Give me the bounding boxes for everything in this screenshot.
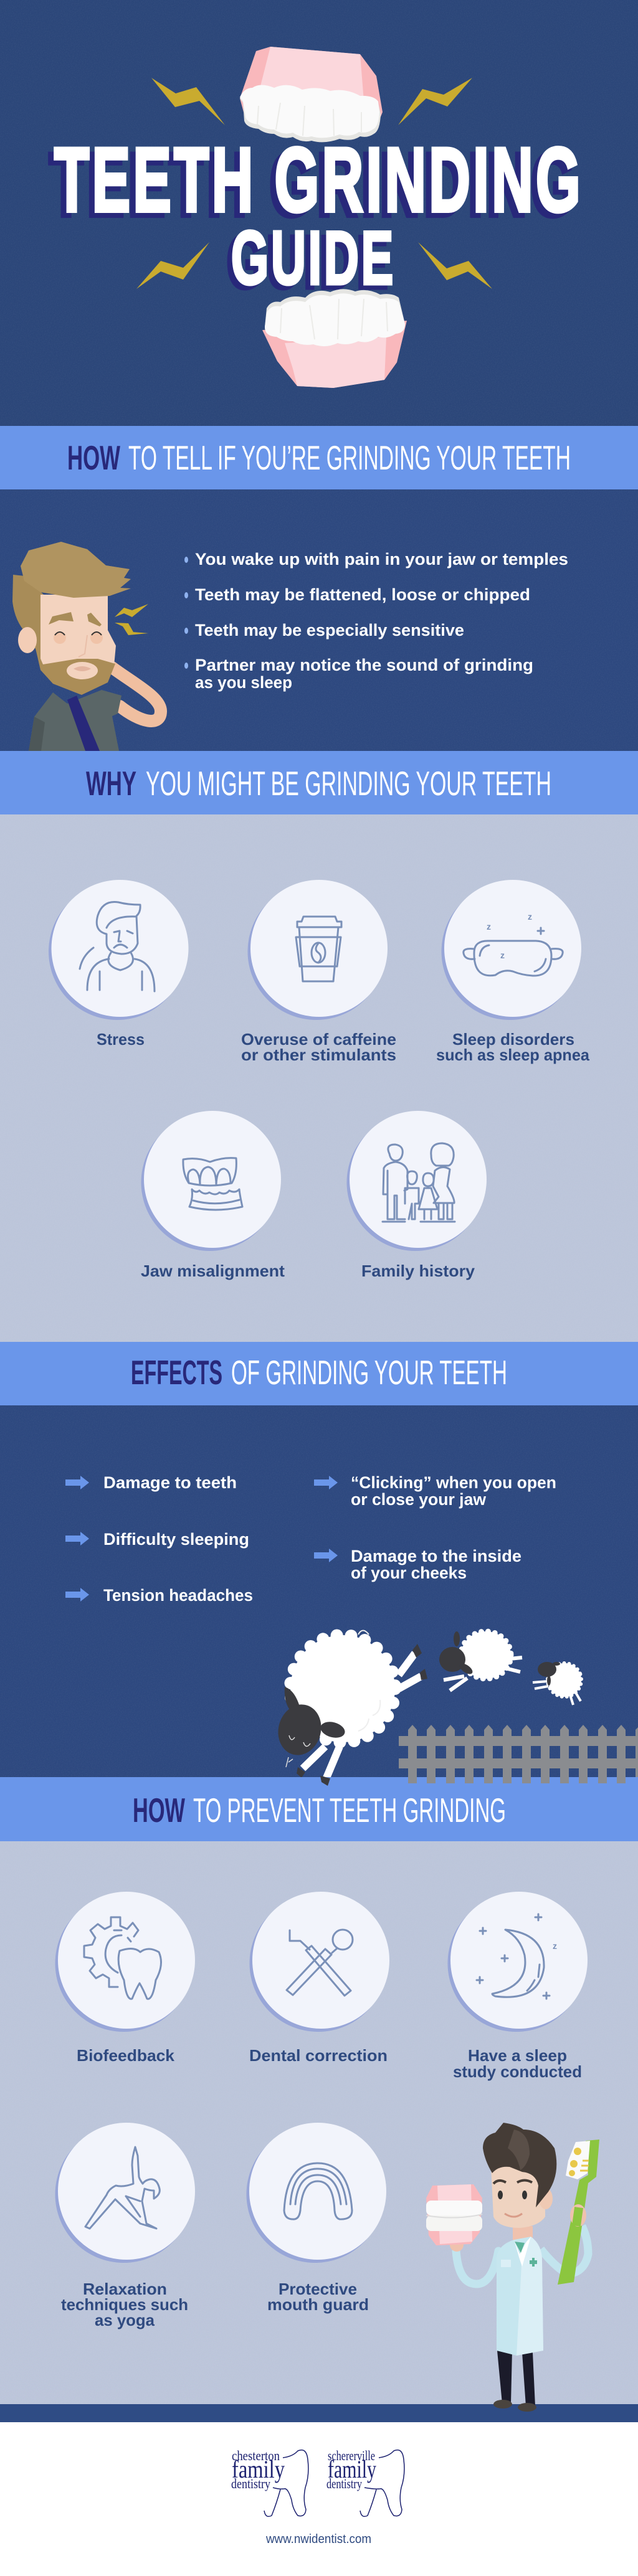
panel: prevention — [55, 1892, 588, 2329]
prevention: sleep study: z — [553, 1941, 557, 1951]
panel: causes — [49, 880, 590, 1280]
list: signs of grinding — [184, 550, 568, 692]
heading band: how to prevent — [0, 1776, 638, 1841]
heading band: why: WHY — [86, 764, 136, 803]
labels: causes: Overuse of caffeine — [241, 1030, 396, 1049]
prevention: mouth guard — [247, 2123, 386, 2263]
icon: lightning bolt bottom left — [136, 242, 209, 289]
labels: prevention: Have a sleep — [468, 2046, 567, 2065]
labels: causes: Sleep disorders — [452, 1030, 574, 1049]
labels: causes: or other stimulants — [241, 1045, 396, 1064]
list: effects right: Damage to the inside — [351, 1547, 521, 1565]
labels: causes: Stress — [97, 1030, 145, 1049]
labels: prevention: mouth guard — [267, 2295, 369, 2314]
prevention: dental correction — [249, 1892, 389, 2032]
icon: lightning bolt top right — [398, 78, 472, 125]
logo: schererville family dentistry: schererville — [328, 2448, 375, 2463]
prevention: biofeedback — [55, 1892, 195, 2032]
logo: chesterton family dentistry: dentistry — [231, 2476, 270, 2491]
logo: chesterton family dentistry — [231, 2448, 308, 2516]
footer url: www.nwidentist.com — [265, 2532, 371, 2546]
labels: prevention: Protective — [279, 2280, 357, 2298]
illustration: lower denture — [262, 289, 407, 388]
logo: schererville family dentistry: dentistry — [326, 2476, 362, 2491]
illustration: man with jaw pain — [12, 542, 161, 751]
panel: hero header — [49, 47, 583, 388]
logo: schererville family dentistry: family — [328, 2455, 376, 2483]
strip: navy footer bar — [0, 2404, 638, 2422]
list: signs of grinding: Partner may notice the sound of grinding — [195, 656, 533, 674]
illustration: large sheep — [273, 1630, 427, 1786]
illustration: dentist — [426, 2123, 599, 2412]
illustration: small sheep — [533, 1658, 586, 1705]
list: signs of grinding: as you sleep — [195, 673, 292, 692]
labels: causes: Family history — [361, 1262, 475, 1280]
title — [49, 129, 583, 304]
labels: prevention: study conducted — [453, 2062, 582, 2081]
labels: causes: such as sleep apnea — [436, 1045, 590, 1064]
list: effects right: of your cheeks — [351, 1564, 467, 1582]
prevention: relaxation — [55, 2123, 195, 2263]
list: effects right — [314, 1473, 556, 1582]
list: effects left: Tension headaches — [103, 1586, 253, 1605]
list: signs of grinding: Teeth may be flattened, loose or chipped — [195, 585, 530, 604]
logo: chesterton family dentistry: family — [232, 2455, 285, 2483]
heading band: effects: EFFECTS — [131, 1353, 222, 1392]
cause: sleep disorders: z — [500, 950, 505, 960]
cause: family history — [346, 1111, 487, 1251]
cause: sleep disorders: z — [528, 912, 532, 922]
illustration: medium sheep — [439, 1631, 522, 1691]
heading band: why — [0, 751, 638, 814]
cause: caffeine — [248, 880, 388, 1020]
cause: stress — [49, 880, 188, 1020]
list: effects left: Damage to teeth — [103, 1473, 237, 1492]
panel: effects — [65, 1473, 638, 1786]
list: signs of grinding: You wake up with pain in your jaw or temples — [195, 550, 568, 569]
heading band: how to prevent: HOW — [133, 1791, 185, 1829]
list: signs of grinding: Teeth may be especially sensitive — [195, 621, 464, 639]
labels: prevention: as yoga — [95, 2311, 155, 2329]
list: effects right: “Clicking” when you open — [351, 1473, 556, 1492]
labels: prevention: Biofeedback — [77, 2046, 175, 2065]
labels: causes: Jaw misalignment — [141, 1262, 285, 1280]
illustration: fence — [399, 1725, 638, 1783]
list: effects left — [65, 1473, 253, 1605]
labels: prevention: Dental correction — [249, 2046, 388, 2065]
panel: how to tell — [12, 542, 568, 751]
cause: jaw misalignment — [141, 1111, 281, 1251]
title: GUIDE — [231, 215, 396, 300]
prevention: sleep study — [447, 1892, 588, 2032]
icon: lightning bolt top left — [151, 78, 225, 125]
labels: prevention: Relaxation — [83, 2280, 167, 2298]
illustration: upper denture — [240, 47, 383, 142]
logo: schererville family dentistry — [326, 2448, 404, 2516]
heading band: how to tell — [0, 426, 638, 489]
title: GUIDE — [226, 220, 391, 304]
icon: lightning bolt bottom right — [418, 242, 492, 289]
logo: chesterton family dentistry: chesterton — [232, 2448, 280, 2463]
labels: causes — [97, 1030, 590, 1280]
cause: sleep disorders — [441, 880, 581, 1020]
cause: sleep disorders: z — [487, 922, 491, 932]
list: effects left: Difficulty sleeping — [103, 1530, 249, 1549]
labels: prevention: techniques such — [61, 2295, 188, 2314]
list: effects right: or close your jaw — [351, 1490, 487, 1509]
heading band: effects — [0, 1342, 638, 1405]
labels: prevention — [61, 2046, 582, 2329]
heading band: how to tell: HOW — [67, 438, 120, 477]
